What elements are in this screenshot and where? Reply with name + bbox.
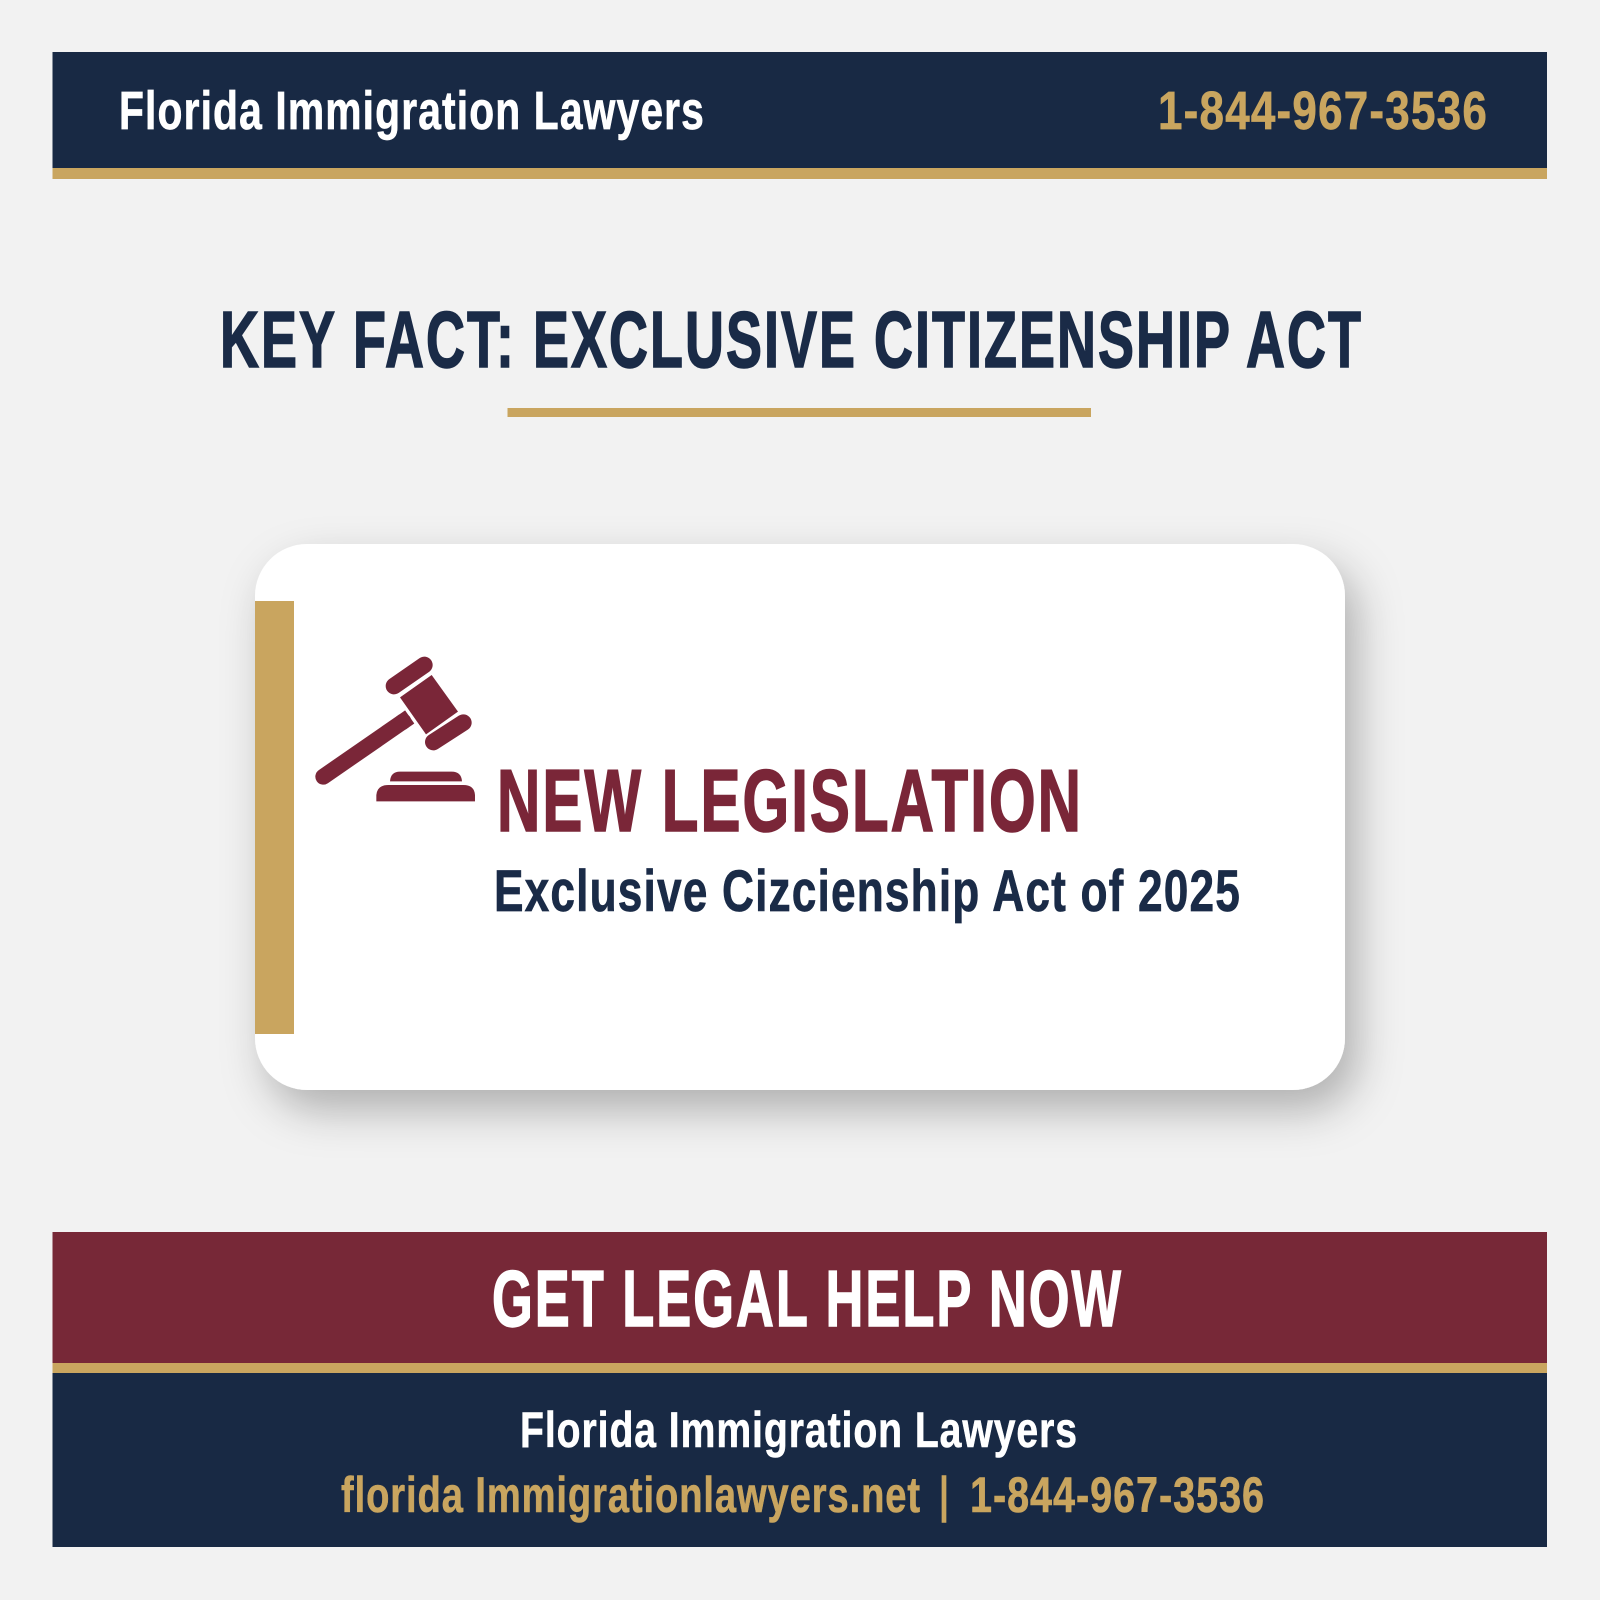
footer website and phone: | <box>938 1467 950 1523</box>
header firm name: Florida Immigration Lawyers <box>119 81 705 141</box>
footer website and phone: 1-844-967-3536 <box>970 1467 1265 1523</box>
header bar <box>52 52 1547 179</box>
call to action text: GET LEGAL HELP NOW <box>492 1254 1123 1343</box>
icon: gavel <box>323 665 475 801</box>
card gold accent bar <box>255 601 294 1034</box>
card heading: NEW LEGISLATION <box>497 751 1083 850</box>
panel: legislation card <box>255 544 1345 1090</box>
gold divider <box>52 1363 1547 1373</box>
header phone number: 1-844-967-3536 <box>1158 81 1488 141</box>
call to action banner <box>52 1232 1547 1363</box>
title underline <box>508 408 1091 417</box>
card subheading: Exclusive Cizcienship Act of 2025 <box>494 859 1241 924</box>
footer firm name: Florida Immigration Lawyers <box>520 1402 1078 1458</box>
footer panel <box>52 1373 1547 1547</box>
footer website and phone: florida Immigrationlawyers.net <box>341 1467 921 1523</box>
